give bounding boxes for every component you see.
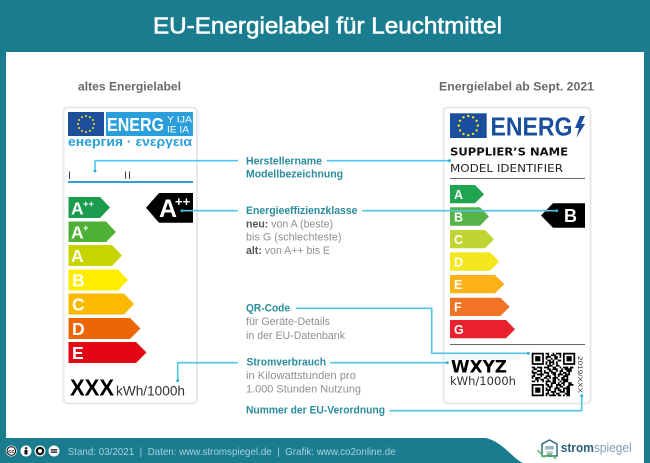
text: energy in other languages: енергия · ενεργεια bbox=[68, 135, 192, 149]
callout: QR code: in der EU-Datenbank bbox=[246, 330, 346, 342]
callout: power consumption bbox=[176, 357, 449, 396]
bar: B bbox=[68, 270, 128, 290]
callout: manufacturer: Modellbezeichnung bbox=[246, 168, 343, 180]
class arrow: A++: A bbox=[159, 195, 177, 223]
icon: QR code bbox=[532, 353, 575, 396]
text: supplier's name: SUPPLIER’S NAME bbox=[450, 146, 568, 158]
icon: lightning bolt bbox=[575, 116, 585, 138]
consumption: XXX kWh/1000h: XXX bbox=[70, 375, 115, 401]
callout: regulation number: Nummer der EU-Verordnung bbox=[246, 404, 385, 416]
footer credits: Stand: 03/2021 | Daten: www.stromspiegel.de | Grafik: www.co2online.de bbox=[68, 446, 396, 458]
bar: D bbox=[68, 318, 140, 339]
bar: E bbox=[68, 342, 146, 363]
bar: A: A bbox=[454, 188, 463, 202]
consumption: XXX kWh/1000h bbox=[70, 375, 185, 401]
callout: QR code: für Geräte-Details bbox=[246, 316, 331, 328]
panel: new energy label bbox=[444, 108, 590, 404]
panel: old energy label bbox=[64, 108, 197, 404]
bar: A bbox=[450, 185, 484, 203]
icon: house with chart line bbox=[538, 440, 557, 459]
bar: A+: A bbox=[71, 222, 84, 242]
callout: efficiency class: alt: von A++ bis E bbox=[246, 245, 330, 257]
consumption: WXYZ kWh/1000h: kWh/1000h bbox=[450, 375, 516, 388]
wordmark: stromspiegel bbox=[561, 440, 632, 455]
bar: A++: A bbox=[71, 198, 84, 218]
class arrow: B bbox=[541, 203, 585, 228]
callout: regulation number bbox=[246, 394, 583, 416]
efficiency scale new bbox=[450, 185, 515, 338]
consumption: WXYZ kWh/1000h bbox=[450, 358, 516, 388]
heading: old label: altes Energielabel bbox=[78, 80, 181, 94]
callout: efficiency class: neu: von A (beste) bbox=[246, 218, 333, 230]
class arrow: A++ bbox=[146, 193, 193, 223]
bar: B: B bbox=[454, 210, 463, 224]
callout: power consumption: in Kilowattstunden pro bbox=[246, 370, 356, 382]
text: regulation number: 2019/XXX bbox=[576, 356, 583, 394]
bar: A+ bbox=[68, 222, 116, 242]
heading: new label: Energielabel ab Sept. 2021 bbox=[439, 80, 594, 94]
bar: A+: + bbox=[83, 223, 89, 234]
bar: E bbox=[450, 275, 504, 293]
callout: power consumption: Stromverbrauch bbox=[246, 357, 326, 369]
bar: F bbox=[450, 298, 510, 316]
callout: power consumption: 1.000 Stunden Nutzung bbox=[246, 384, 361, 396]
logo: stromspiegel bbox=[538, 440, 632, 459]
text: model identifier: MODEL IDENTIFIER bbox=[450, 162, 564, 175]
bar: A bbox=[68, 245, 122, 266]
icons: creative commons licence: cc bbox=[8, 449, 14, 455]
bar: A++ bbox=[68, 197, 110, 218]
bar: D bbox=[450, 252, 499, 271]
bar: B bbox=[450, 207, 489, 226]
icon: EU flag old bbox=[68, 112, 104, 136]
logo banner: ENERG old: IE IA bbox=[167, 124, 189, 134]
bar: C bbox=[450, 230, 494, 248]
bar: E: E bbox=[454, 278, 462, 292]
bar: C bbox=[68, 294, 134, 314]
callout: efficiency class: Energieeffizienzklasse bbox=[246, 205, 358, 217]
bar: G bbox=[450, 320, 515, 338]
efficiency scale old bbox=[68, 197, 146, 363]
bar: C: C bbox=[72, 294, 85, 314]
callout: manufacturer bbox=[94, 155, 451, 180]
bar: C: C bbox=[454, 233, 463, 247]
consumption: XXX kWh/1000h: kWh/1000h bbox=[116, 384, 185, 399]
logo banner: ENERG old bbox=[106, 112, 193, 136]
icons: creative commons licence bbox=[6, 446, 60, 456]
class arrow: A++: ++ bbox=[175, 194, 191, 209]
logo: ENERG new: ENERG bbox=[490, 111, 572, 141]
logo banner: ENERG old: ENERG bbox=[107, 115, 164, 135]
callout: QR code: QR-Code bbox=[246, 303, 290, 315]
callout: efficiency class: bis G (schlechteste) bbox=[246, 232, 342, 244]
bar: D: D bbox=[454, 256, 463, 270]
class arrow: B: B bbox=[564, 206, 577, 226]
consumption: WXYZ kWh/1000h: WXYZ bbox=[451, 358, 507, 377]
bar: G: G bbox=[454, 323, 464, 337]
bar: A++: ++ bbox=[83, 199, 95, 210]
callout: QR code bbox=[246, 303, 530, 355]
callout: efficiency class bbox=[180, 205, 558, 257]
title: EU-Energielabel für Leuchtmittel bbox=[153, 12, 502, 38]
bar: D: D bbox=[72, 319, 85, 339]
bar: E: E bbox=[72, 343, 84, 363]
bar: F: F bbox=[454, 300, 462, 314]
logo banner: ENERG old: Y IJA bbox=[167, 114, 192, 124]
bar: B: B bbox=[72, 270, 85, 290]
supplier placeholder marks bbox=[69, 172, 130, 179]
bar: A: A bbox=[71, 246, 84, 266]
icon: EU flag new bbox=[450, 113, 487, 138]
callout: manufacturer: Herstellername bbox=[246, 155, 322, 167]
